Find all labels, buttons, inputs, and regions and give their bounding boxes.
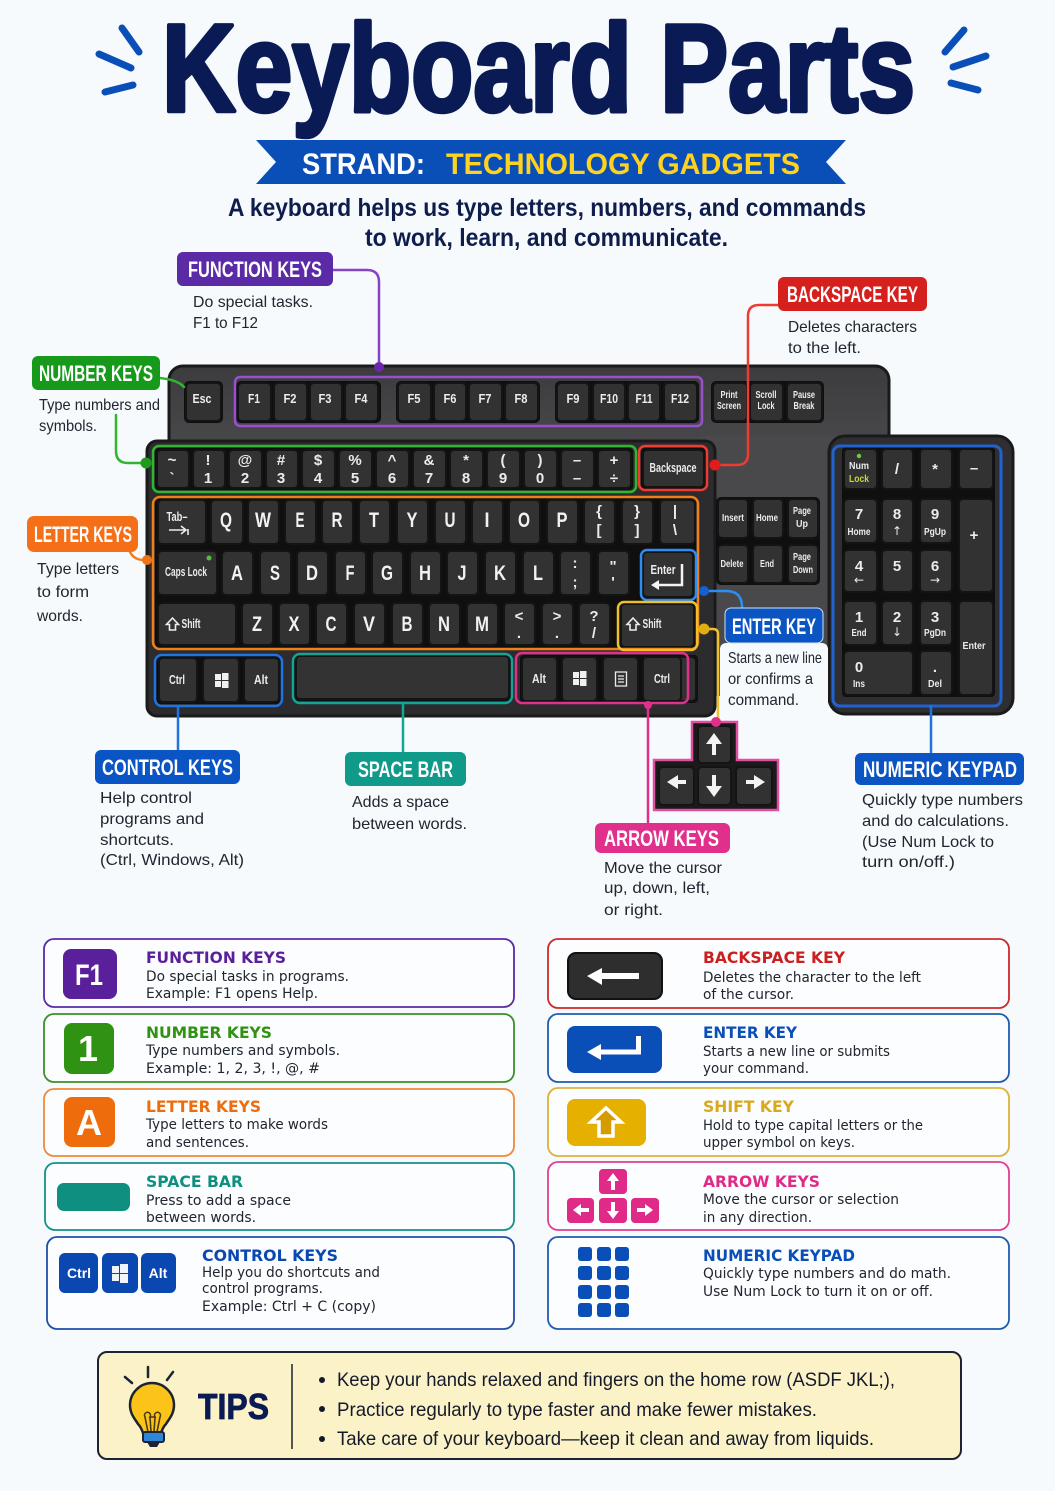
function key row: F10 [600, 391, 618, 406]
text: number keys description: Type numbers and [39, 397, 160, 414]
numeric keypad keys: 4 [855, 558, 864, 575]
card: backspace key: of the cursor. [703, 987, 794, 1003]
card: space bar: between words. [146, 1210, 256, 1226]
numeric keypad keys: Home [848, 527, 871, 538]
tips list: Take care of your keyboard—keep it clean and away from liquids. [337, 1428, 874, 1450]
card: backspace key [548, 939, 1009, 1008]
numeric keypad keys: PgDn [924, 628, 946, 639]
card: enter key: ENTER KEY [703, 1023, 797, 1042]
connector: shift key [698, 624, 718, 722]
function key row: F7 [478, 391, 492, 406]
enter key: Enter [650, 562, 676, 577]
card: shift key: SHIFT KEY [703, 1097, 794, 1116]
function key row: F1 [248, 391, 260, 406]
tips list: Practice regularly to type faster and make fewer mistakes. [337, 1399, 817, 1421]
card: function keys [44, 939, 514, 1007]
connector: backspace key [710, 305, 778, 470]
number key row: ^ [388, 452, 397, 469]
number key row: 0 [536, 470, 544, 487]
card: letter keys: Type letters to make words [145, 1117, 328, 1133]
text: enter key description: Starts a new line [728, 650, 822, 667]
text: control keys description: programs and [100, 811, 204, 828]
card: arrow keys: Move the cursor or selection [703, 1192, 899, 1208]
letter key rows: Shift [182, 616, 201, 631]
card: control keys: Example: Ctrl + C (copy) [202, 1299, 376, 1315]
card: arrow keys: ARROW KEYS [703, 1172, 820, 1191]
letter key rows: L [533, 562, 543, 585]
letter key rows: H [419, 562, 431, 585]
card: arrow keys [548, 1162, 1009, 1230]
text: numeric keypad description: Quickly type numbers [862, 792, 1023, 809]
bottom modifier row: Ctrl [169, 672, 185, 687]
function key row: F9 [566, 391, 580, 406]
heading: tips: TIPS [198, 1386, 269, 1427]
number key row: 2 [241, 470, 249, 487]
subtitle: A keyboard helps us type letters, numbers, and commands [228, 194, 866, 222]
letter key rows: } [634, 503, 640, 520]
numeric keypad keys [844, 449, 993, 695]
label: letter keys: LETTER KEYS [34, 522, 132, 547]
numeric keypad keys: 0 [855, 659, 863, 676]
letter key rows: F [346, 562, 355, 585]
numeric keypad keys: 1 [855, 609, 863, 626]
card: number keys: Type numbers and symbols. [145, 1043, 340, 1059]
tips list: Keep your hands relaxed and fingers on the home row (ASDF JKL;), [337, 1369, 895, 1391]
icon: A key [64, 1097, 115, 1147]
card: letter keys: and sentences. [146, 1135, 249, 1151]
function key row [186, 383, 822, 421]
card: numeric keypad: Quickly type numbers and do math. [703, 1266, 951, 1282]
numeric keypad keys: 3 [931, 609, 939, 626]
label: arrow keys: ARROW KEYS [604, 826, 719, 851]
label: letter keys [27, 516, 138, 552]
navigation cluster: Insert [722, 513, 745, 524]
right shift key: Shift [642, 616, 662, 631]
icon: light bulb [125, 1367, 174, 1447]
text: backspace key description [788, 319, 917, 357]
panel: tips [98, 1352, 961, 1459]
number key row: ( [500, 452, 506, 469]
icon: enter arrow key [567, 1026, 662, 1073]
letter key rows: > [553, 608, 562, 625]
icon: keypad grid [578, 1247, 629, 1317]
text: arrow keys description: Move the cursor [604, 860, 723, 877]
icon: 1 key: 1 [78, 1028, 98, 1069]
label: numeric keypad [855, 753, 1024, 785]
letter key rows: K [494, 562, 506, 585]
number key row: 5 [351, 470, 359, 487]
letter key rows: J [458, 562, 466, 585]
card: enter key: your command. [703, 1061, 809, 1077]
letter key rows: R [332, 509, 342, 532]
number key row: + [610, 452, 619, 469]
number key row: * [463, 452, 469, 469]
right shift key [621, 604, 694, 647]
card: shift key: Hold to type capital letters or the [703, 1118, 923, 1134]
text: function keys description: F1 to F12 [193, 315, 258, 332]
text: arrow keys description: up, down, left, [604, 880, 710, 897]
number key row: % [348, 452, 362, 469]
icon: ctrl win alt keys [59, 1253, 176, 1293]
letter key rows: ? [589, 608, 599, 625]
label: function keys: FUNCTION KEYS [188, 257, 322, 282]
number key row: 1 [204, 470, 212, 487]
number key row: & [424, 452, 435, 469]
function key row: F2 [284, 391, 296, 406]
ribbon: strand: STRAND: [302, 148, 425, 181]
number key row [157, 450, 704, 488]
function key row: F4 [354, 391, 368, 406]
connector: function keys [333, 270, 384, 372]
number key row: – [573, 470, 581, 487]
letter key rows: Tab– [166, 509, 188, 524]
bottom modifier row [159, 656, 696, 702]
letter key rows: " [609, 558, 617, 575]
card: control keys: control programs. [202, 1281, 323, 1297]
numeric keypad keys: 8 [893, 506, 901, 523]
number key row: 8 [462, 470, 470, 487]
card: numeric keypad [548, 1237, 1009, 1329]
numeric keypad keys: / [895, 461, 900, 478]
function key row: Esc [192, 391, 212, 406]
text: letter keys description: to form [37, 584, 89, 601]
text: space bar description: between words. [352, 816, 467, 833]
text: number keys description [39, 397, 160, 435]
function key row: Scroll [756, 390, 777, 401]
text: control keys description: Help control [100, 790, 192, 807]
title: Keyboard Parts [162, 0, 915, 138]
numeric keypad keys: → [930, 573, 940, 587]
letter key rows: O [518, 509, 530, 532]
function key row: Lock [758, 401, 775, 412]
label: number keys [32, 356, 160, 390]
icon: shift arrow key [567, 1099, 646, 1146]
text: numeric keypad description: and do calculations. [862, 813, 1009, 830]
text: numeric keypad description [862, 792, 1023, 871]
letter key rows: M [475, 613, 489, 636]
numeric keypad keys: 6 [931, 558, 939, 575]
function key row: Break [794, 401, 815, 412]
icon: left burst dashes [99, 28, 139, 92]
text: letter keys description: words. [36, 608, 83, 625]
text: number keys description: symbols. [39, 418, 97, 435]
letter key rows: . [517, 625, 521, 642]
card: numeric keypad: Use Num Lock to turn it on or off. [703, 1284, 933, 1300]
text: enter key description: or confirms a [728, 671, 813, 688]
navigation cluster: Page [793, 506, 811, 517]
connector: number keys [116, 378, 184, 468]
card: control keys [47, 1237, 514, 1329]
label: control keys: CONTROL KEYS [102, 755, 233, 780]
number key row: ` [170, 470, 174, 487]
icon: ctrl win alt keys: Alt [149, 1265, 168, 1281]
numeric keypad keys: 5 [893, 558, 901, 575]
card: control keys: CONTROL KEYS [202, 1246, 338, 1265]
numeric keypad keys: Num [849, 461, 869, 472]
label: space bar [345, 752, 466, 786]
navigation cluster [718, 499, 818, 583]
function key row: F5 [408, 391, 420, 406]
card: number keys [44, 1014, 514, 1082]
numeric keypad keys: ↓ [892, 625, 902, 639]
letter key rows: Z [252, 613, 262, 636]
function key row: F3 [318, 391, 332, 406]
text: letter keys description: Type letters [37, 561, 119, 578]
numeric keypad keys: . [933, 659, 937, 676]
numeric keypad keys: End [852, 628, 866, 639]
text: control keys description: (Ctrl, Windows, Alt) [100, 852, 244, 869]
number key row: ÷ [610, 470, 618, 487]
number key row: 3 [277, 470, 285, 487]
text: function keys description: Do special tasks. [193, 294, 313, 311]
letter key rows: V [363, 613, 375, 636]
number key row: ~ [168, 452, 177, 469]
card: numeric keypad: NUMERIC KEYPAD [703, 1246, 855, 1265]
label: backspace key: BACKSPACE KEY [787, 282, 918, 307]
card: enter key [548, 1014, 1009, 1082]
number key row: 7 [425, 470, 433, 487]
number key row: ) [538, 452, 542, 469]
enter key [643, 552, 693, 597]
card: space bar: Press to add a space [146, 1193, 291, 1209]
icon: F1 key [63, 949, 117, 999]
text: letter keys description [36, 561, 119, 625]
letter key rows: Y [406, 509, 418, 532]
subtitle: to work, learn, and communicate. [365, 224, 728, 252]
navigation cluster: Up [796, 519, 808, 530]
letter key rows: | [673, 503, 677, 520]
letter key rows: Caps Lock [165, 564, 207, 579]
card: letter keys: LETTER KEYS [146, 1097, 261, 1116]
label: enter key: ENTER KEY [732, 614, 816, 639]
card: shift key: upper symbol on keys. [703, 1135, 855, 1151]
letter key rows: [ [596, 522, 602, 539]
numeric keypad keys: 9 [931, 506, 939, 523]
numeric keypad keys: – [970, 460, 978, 477]
card: function keys: FUNCTION KEYS [146, 948, 286, 967]
label: enter key [725, 608, 823, 643]
number key row: $ [314, 452, 323, 469]
bottom modifier row: Ctrl [654, 671, 670, 686]
numeric keypad keys: + [970, 527, 979, 544]
letter key rows: ] [634, 522, 640, 539]
card: space bar [45, 1163, 514, 1230]
letter key rows: X [288, 613, 300, 636]
icon: F1 key: F1 [75, 959, 103, 992]
label: arrow keys [595, 823, 730, 853]
number key row: # [277, 452, 286, 469]
text: control keys description: shortcuts. [100, 832, 174, 849]
label: function keys [177, 252, 333, 286]
navigation cluster: Delete [720, 559, 744, 570]
navigation cluster: Down [793, 565, 813, 576]
navigation cluster: Home [756, 513, 778, 524]
function key row: Pause [793, 390, 815, 401]
text: arrow keys description: or right. [604, 902, 663, 919]
connector: letter keys [130, 552, 152, 565]
highlight outlines [153, 377, 1001, 706]
connector: control keys [177, 707, 179, 751]
label: space bar: SPACE BAR [358, 757, 453, 782]
label: control keys [95, 750, 240, 784]
number key row: Backspace [650, 460, 696, 475]
icon: ctrl win alt keys: Ctrl [67, 1265, 91, 1281]
text: backspace key description: to the left. [788, 340, 861, 357]
numeric keypad keys: * [932, 461, 938, 478]
letter key rows: W [255, 509, 271, 532]
numeric keypad keys: PgUp [924, 527, 946, 538]
letter key rows: ' [611, 574, 615, 591]
connector: space bar [402, 703, 404, 753]
text: space bar description [352, 794, 467, 833]
letter key rows: P [556, 509, 568, 532]
card: letter keys [44, 1089, 514, 1156]
letter key rows [158, 500, 695, 645]
numeric keypad keys: Del [928, 679, 942, 690]
number key row: ! [206, 452, 210, 469]
card: number keys: Example: 1, 2, 3, !, @, # [146, 1061, 320, 1077]
text: numeric keypad description: (Use Num Lock to [862, 834, 994, 851]
card: space bar: SPACE BAR [146, 1172, 243, 1191]
letter key rows: < [515, 608, 524, 625]
text: enter key description: command. [728, 692, 799, 709]
card: backspace key: BACKSPACE KEY [703, 948, 845, 967]
card: enter key: Starts a new line or submits [703, 1044, 890, 1060]
numeric keypad keys: 2 [893, 609, 901, 626]
text: numeric keypad description: turn on/off.) [862, 854, 955, 871]
letter key rows: C [326, 613, 336, 636]
ribbon: strand: TECHNOLOGY GADGETS [446, 148, 800, 181]
number key row: – [573, 452, 581, 469]
numeric keypad keys: Enter [962, 641, 986, 652]
label: backspace key [778, 277, 927, 311]
letter key rows: Q [220, 509, 232, 532]
arrow keys cluster [654, 722, 778, 810]
letter key rows: D [306, 562, 318, 585]
letter key rows: G [381, 562, 393, 585]
letter key rows: ; [572, 574, 578, 591]
number key row: 4 [314, 470, 323, 487]
card: function keys: Example: F1 opens Help. [146, 986, 318, 1002]
card: control keys: Help you do shortcuts and [202, 1265, 380, 1281]
letter key rows: \ [673, 522, 678, 539]
letter key rows: S [270, 562, 280, 585]
bottom modifier row: Alt [254, 672, 269, 687]
card: number keys: NUMBER KEYS [146, 1023, 272, 1042]
connector: enter key [699, 586, 742, 607]
letter key rows: E [296, 509, 304, 532]
numeric keypad keys: 7 [855, 506, 863, 523]
function key row: Print [720, 390, 738, 401]
letter key rows: { [596, 503, 602, 520]
icon: arrow keys [567, 1169, 659, 1223]
letter key rows: : [572, 555, 578, 572]
numeric keypad keys: Lock [849, 474, 869, 485]
card: shift key [548, 1088, 1009, 1156]
text: function keys description [193, 294, 313, 332]
letter key rows: N [438, 613, 450, 636]
ribbon: strand [256, 140, 846, 184]
number key row: @ [238, 452, 252, 469]
icon: space bar key [57, 1183, 130, 1211]
letter key rows: B [402, 613, 412, 636]
letter key rows: . [555, 625, 559, 642]
bottom modifier row: Alt [532, 671, 547, 686]
keyboard body [147, 366, 1013, 719]
letter key rows: U [444, 509, 456, 532]
function key row: F6 [444, 391, 456, 406]
tips list [319, 1369, 895, 1450]
icon: A key: A [76, 1102, 102, 1143]
icon: right burst dashes [945, 30, 986, 90]
navigation cluster: End [760, 559, 774, 570]
number key row: 6 [388, 470, 396, 487]
function key row: Screen [717, 401, 741, 412]
text: backspace key description: Deletes characters [788, 319, 917, 336]
label: number keys: NUMBER KEYS [39, 361, 153, 386]
text: control keys description [100, 790, 244, 869]
function key row: F11 [636, 391, 652, 406]
icon: 1 key [64, 1023, 114, 1074]
text: enter key description [728, 650, 822, 709]
connector: arrow keys [644, 701, 721, 824]
text: space bar description: Adds a space [352, 794, 449, 811]
card: arrow keys: in any direction. [703, 1210, 812, 1226]
letter key rows: T [369, 509, 379, 532]
letter key rows: I [484, 509, 490, 532]
letter key rows: / [592, 625, 597, 642]
letter key rows: A [231, 562, 243, 585]
function key row: F8 [514, 391, 528, 406]
card: backspace key: Deletes the character to the left [703, 970, 921, 986]
connector: numeric keypad [930, 706, 932, 754]
subtitle [228, 194, 866, 252]
text: arrow keys description [604, 860, 723, 919]
navigation cluster: Page [793, 552, 811, 563]
numeric keypad keys: Ins [853, 679, 865, 690]
number key row: 9 [499, 470, 507, 487]
function key row: F12 [671, 391, 689, 406]
card: function keys: Do special tasks in programs. [146, 969, 349, 985]
icon: backspace arrow key [568, 953, 662, 999]
numeric keypad keys: ← [854, 573, 864, 587]
numeric keypad keys: ↑ [892, 524, 902, 538]
